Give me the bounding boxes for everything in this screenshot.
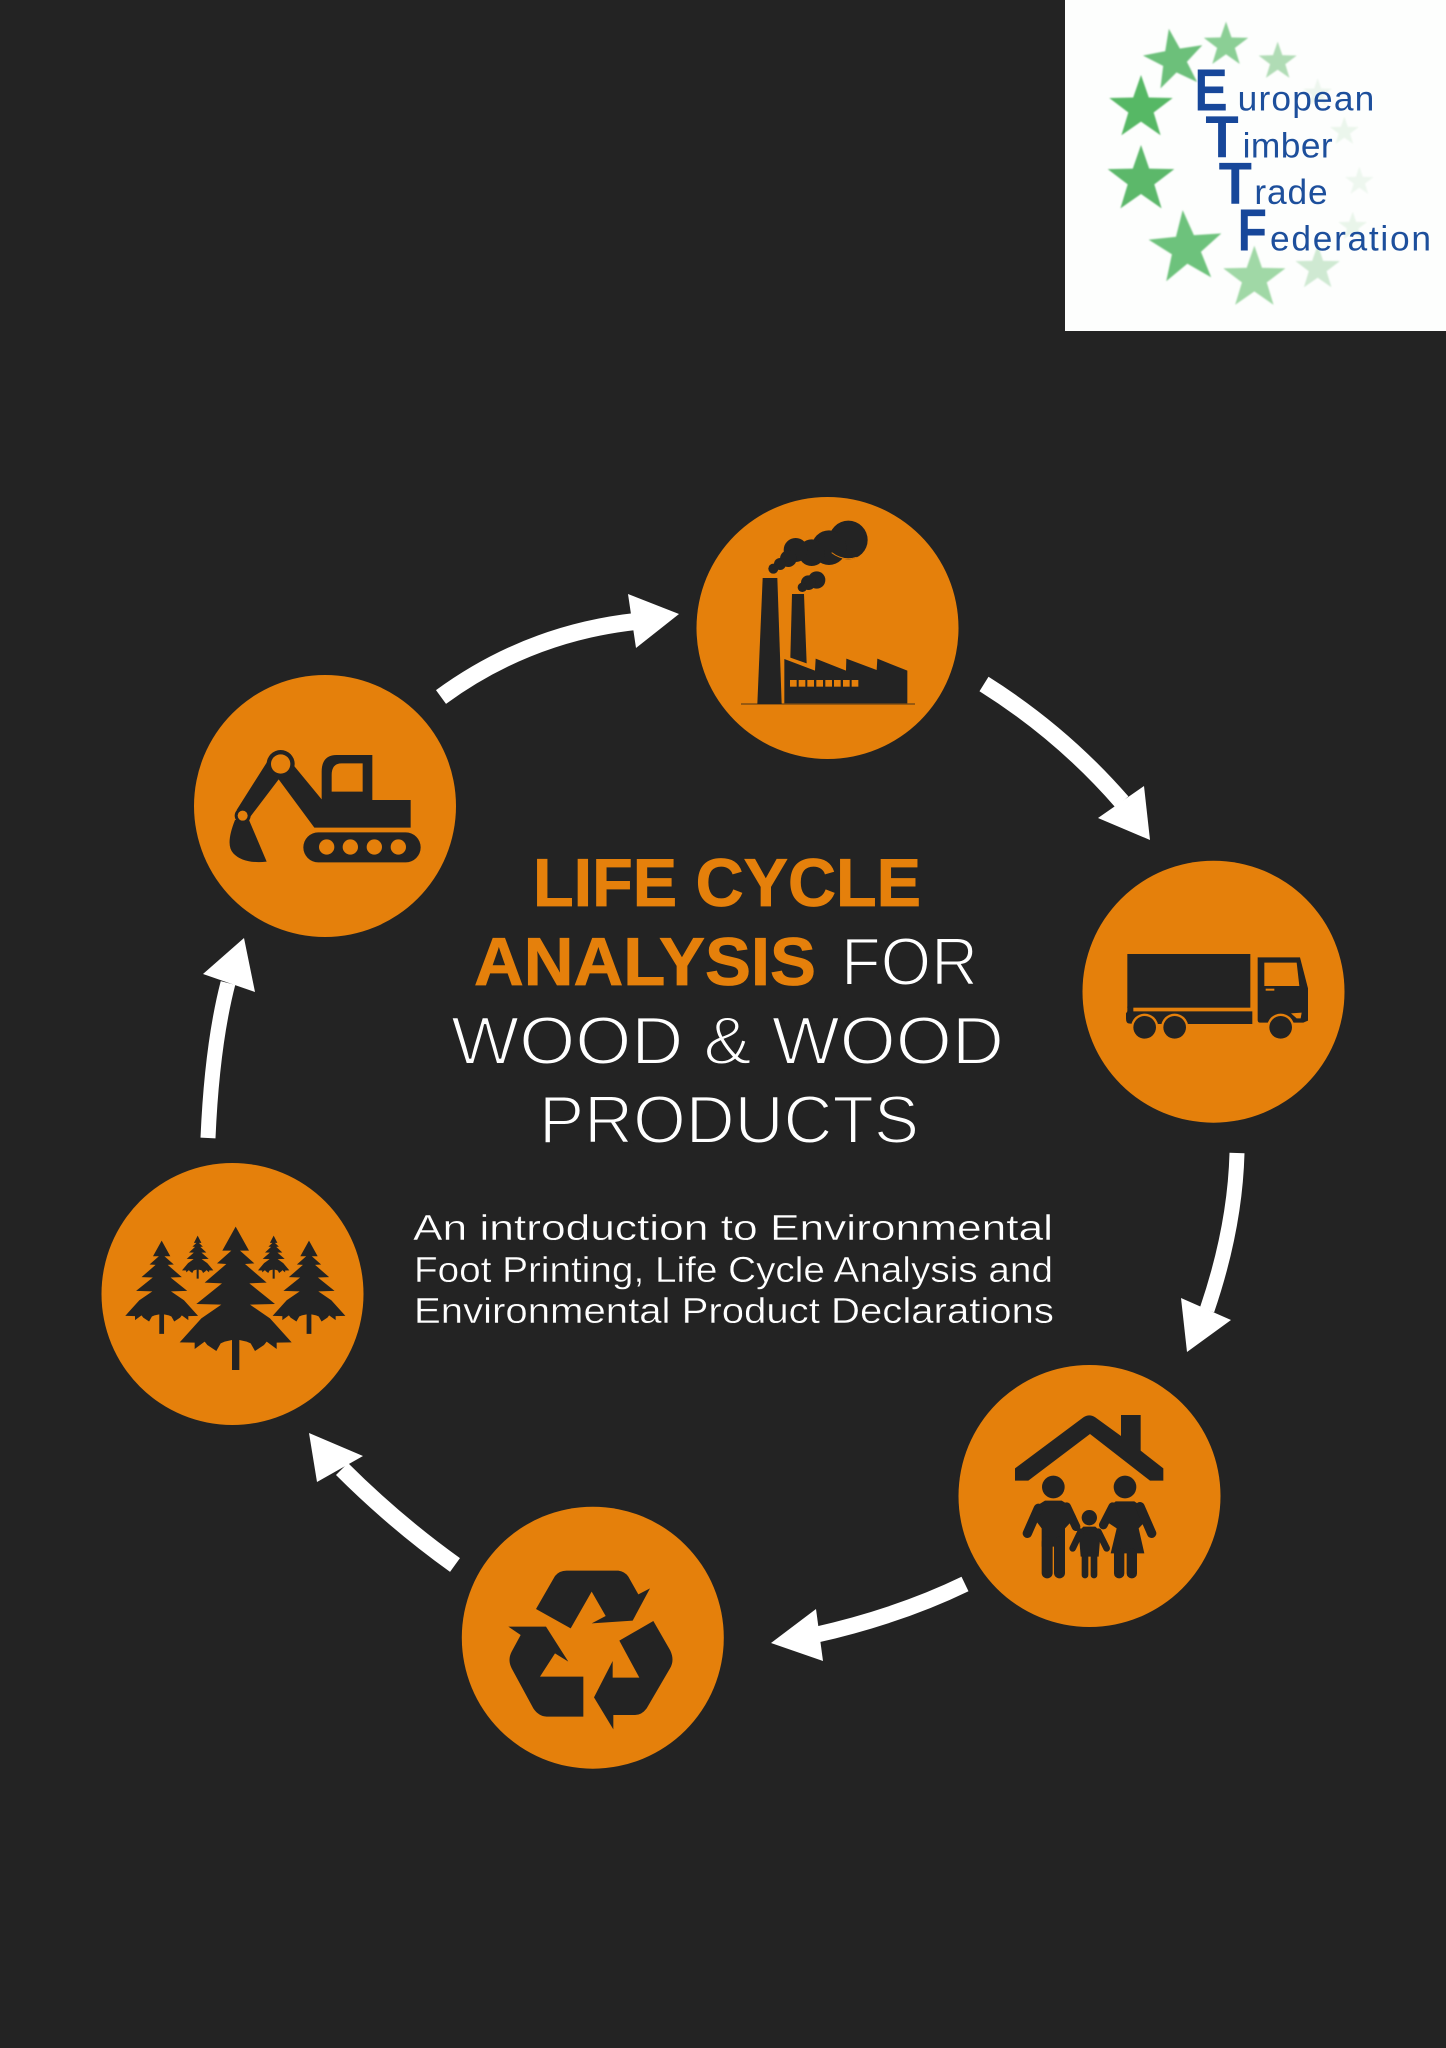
arrow: house to recycling (771, 1584, 965, 1661)
logo: European Timber Trade Federation: T (1219, 150, 1252, 217)
subtitle text block: Foot Printing, Life Cycle Analysis and (414, 1249, 1053, 1290)
arrow: truck to house (1181, 1153, 1237, 1352)
title (451, 845, 1004, 1158)
panel: forest stage (102, 1163, 364, 1425)
subtitle text block: Environmental Product Declarations (414, 1290, 1054, 1331)
panel: recycling stage (462, 1507, 724, 1769)
logo: European Timber Trade Federation: imber (1243, 126, 1333, 165)
logo: European Timber Trade Federation: uropean (1238, 80, 1374, 119)
panel: factory stage (696, 497, 958, 759)
icon: excavator (230, 750, 421, 862)
title: LIFE CYCLE (533, 845, 921, 921)
panel: truck stage (1082, 861, 1344, 1123)
arrow: excavator to factory (441, 594, 679, 697)
logo: European Timber Trade Federation (1065, 0, 1446, 331)
icon: factory with smoking chimneys (741, 521, 915, 704)
icon: recycling arrows (508, 1571, 672, 1729)
title: PRODUCTS (539, 1082, 919, 1158)
panel: home and family stage (958, 1365, 1220, 1627)
title: WOOD & WOOD (451, 1003, 1004, 1079)
title: ANALYSIS (474, 924, 816, 1000)
subtitle text block (413, 1207, 1054, 1331)
icon: truck (1126, 954, 1308, 1041)
arrow: factory to truck (984, 684, 1150, 840)
icon: pine trees (125, 1227, 345, 1370)
arrow: recycling to forest (309, 1433, 455, 1565)
panel: excavator stage (194, 675, 456, 937)
logo: European Timber Trade Federation: E (1194, 57, 1228, 124)
title: FOR (841, 924, 978, 1000)
logo: European Timber Trade Federation: ederation (1270, 220, 1431, 259)
logo: European Timber Trade Federation: T (1205, 103, 1239, 170)
subtitle text block: An introduction to Environmental (413, 1207, 1053, 1248)
arrow: forest to excavator (203, 938, 255, 1138)
logo: European Timber Trade Federation: F (1238, 197, 1267, 264)
icon: family under a roof (1015, 1415, 1163, 1578)
logo: European Timber Trade Federation: rade (1254, 173, 1328, 212)
